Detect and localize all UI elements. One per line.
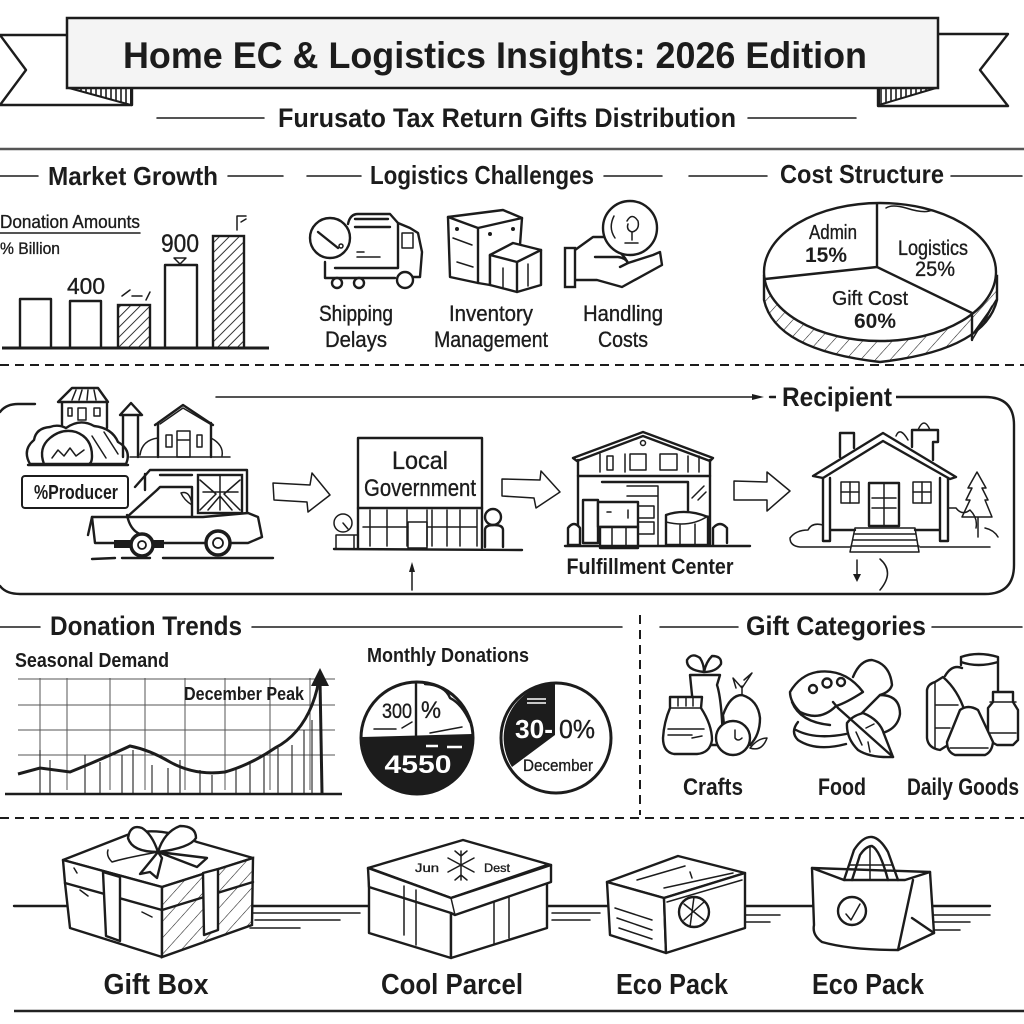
label: cool parcel: Cool Parcel: [381, 969, 523, 1001]
label: shipping delays: Shipping: [319, 301, 393, 326]
donut chart left: 4550: [384, 751, 452, 779]
bar chart: 400: [67, 273, 105, 299]
panel: logistics challenges: Delays: [325, 327, 387, 352]
heading: market growth: Market Growth: [48, 161, 218, 191]
icon: stacked boxes: [448, 210, 541, 292]
icon: food: [790, 660, 900, 757]
subtitle: Furusato Tax Return Gifts Distribution: [278, 103, 736, 133]
pie chart: 15%: [805, 244, 847, 267]
icon: cool parcel: Jun: [415, 861, 439, 875]
icon: gift box: [63, 826, 253, 957]
arrow: to recipient: [216, 394, 764, 400]
pie chart: 60%: [854, 310, 896, 333]
title banner: [0, 18, 1008, 106]
icon: eco pack box: [607, 856, 745, 953]
title banner: Home EC & Logistics Insights: 2026 Edition: [123, 35, 867, 76]
icon: recipient house: [790, 423, 998, 552]
label: eco pack 1: Eco Pack: [616, 969, 729, 1001]
bar chart: 900: [161, 230, 199, 258]
heading: gift categories: Gift Categories: [746, 611, 926, 641]
panel: distribution flow: [0, 382, 1014, 594]
label: crafts: Crafts: [683, 774, 743, 801]
label: eco pack 2: Eco Pack: [812, 969, 925, 1001]
legend label: Donation Amounts: [0, 212, 140, 232]
icon: delayed truck: [310, 214, 422, 288]
legend label: % Billion: [0, 239, 60, 258]
pie chart: 25%: [915, 258, 955, 281]
panel: packaging: [14, 826, 990, 1001]
icon: producer farm: %Producer: [34, 482, 118, 504]
label: inventory management: Inventory: [449, 301, 533, 326]
pie chart: [764, 203, 997, 362]
label: handling costs: Handling: [583, 301, 663, 326]
icon: crafts: [663, 655, 767, 755]
icon: fulfillment center: [565, 432, 750, 548]
donut chart left: %: [421, 697, 441, 724]
icon: cool parcel: Dest: [484, 861, 511, 875]
label: fulfillment center: Fulfillment Center: [566, 554, 734, 579]
donut chart right: 0%: [559, 714, 595, 744]
arrow 3: [734, 472, 790, 511]
arrow 2: [502, 471, 560, 508]
label: gift box: Gift Box: [104, 969, 208, 1001]
label: monthly donations: Monthly Donations: [367, 645, 529, 667]
heading: cost structure: Cost Structure: [780, 159, 944, 189]
icon: eco tote bag: [812, 837, 934, 950]
pie chart: Admin: [809, 222, 857, 244]
legend label: [0, 212, 140, 258]
panel: market growth: [0, 161, 283, 348]
arrow 1: [273, 473, 330, 512]
panel: distribution flow: Recipient: [782, 382, 892, 412]
label: food: Food: [818, 774, 866, 801]
icon: cool parcel: [368, 840, 551, 958]
arrow: up small: [409, 562, 415, 590]
icon: local government: [334, 438, 522, 550]
panel: logistics challenges: [307, 160, 663, 352]
donut chart right: December: [523, 756, 593, 775]
panel: donation trends: [0, 611, 622, 794]
heading: logistics challenges: Logistics Challenges: [370, 160, 594, 190]
icon: local government: Local: [392, 447, 448, 475]
donut chart left: 300: [382, 700, 412, 723]
icon: daily goods: [927, 654, 1018, 755]
line chart: December Peak: [184, 684, 305, 704]
pie chart: Logistics: [898, 237, 968, 260]
bar chart: [2, 216, 269, 348]
panel: cost structure: [689, 159, 1022, 362]
icon: producer farm: [22, 388, 230, 508]
donut chart left: [361, 682, 473, 794]
arrows: below house: [853, 559, 888, 590]
flow frame: [0, 397, 1014, 594]
heading: donation trends: Donation Trends: [50, 611, 242, 641]
donut chart right: [501, 683, 611, 793]
label: recipient: [776, 385, 896, 409]
panel: logistics challenges: Management: [434, 327, 548, 352]
panel: logistics challenges: Costs: [598, 327, 648, 352]
pie chart: Gift Cost: [832, 288, 908, 310]
icon: hand holding coin: [565, 201, 662, 287]
icon: delivery vehicle: [88, 470, 273, 559]
icon: local government: Government: [364, 475, 476, 502]
panel: gift categories: [660, 611, 1022, 801]
donut chart right: 30-: [515, 714, 553, 744]
label: seasonal demand: Seasonal Demand: [15, 650, 169, 672]
line chart: [5, 668, 342, 794]
